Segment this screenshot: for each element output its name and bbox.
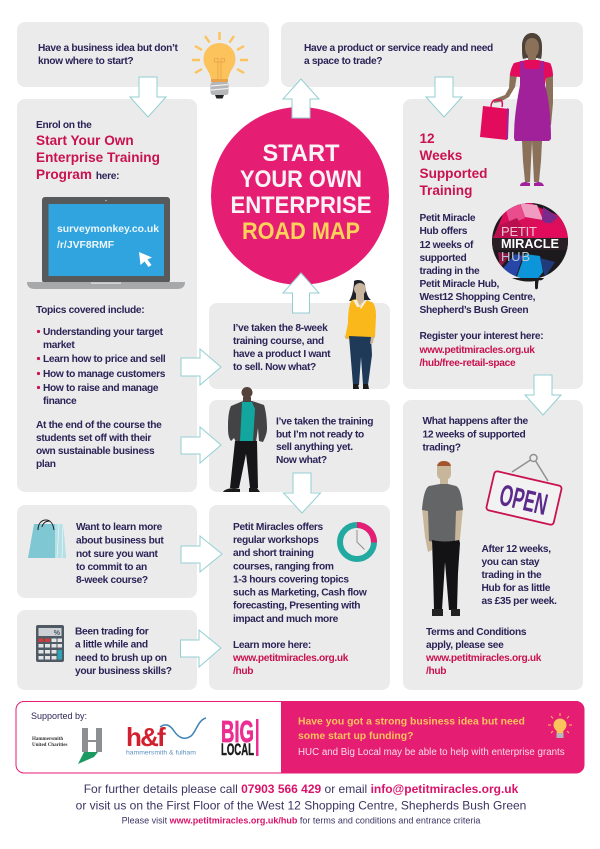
panel: not ready to sell: sell anything yet. — [276, 442, 353, 453]
title circle: ENTERPRISE — [230, 192, 372, 219]
panel: workshops and short courses: courses, ranging from — [233, 562, 334, 572]
text: hub description: supported — [420, 253, 466, 264]
panel: learn more about business — [17, 505, 197, 598]
panel: supporters and funding — [16, 701, 584, 773]
logo: Big Local — [221, 714, 258, 759]
panel: workshops and short courses: Learn more here: — [233, 640, 311, 651]
heading: 12 weeks: Training — [420, 183, 472, 198]
text: hub description: Register your interest here: — [420, 331, 543, 342]
panel: brush up on skills: need to brush up on — [75, 653, 167, 664]
logo: Big Local: LOCAL — [221, 741, 254, 759]
title circle — [211, 107, 389, 285]
panel: taken 8-week course: training course, and — [233, 336, 324, 347]
title circle: ROAD MAP — [242, 218, 360, 245]
title circle: START — [262, 140, 340, 167]
heading: 12 weeks: Weeks — [420, 148, 462, 163]
text: hub description: /hub/free-retail-space — [420, 358, 516, 369]
panel: learn more about business: 8-week course? — [76, 575, 148, 586]
panel: product or service question: Have a product or service ready and need — [304, 43, 493, 54]
text: topics covered: How to manage customers — [43, 369, 166, 380]
panel: not ready to sell: I’ve taken the training — [276, 416, 373, 428]
arrow: training to not ready — [181, 427, 221, 463]
figure: woman in yellow jumper — [344, 280, 376, 389]
panel: enrol on training program: Enrol on the — [36, 120, 92, 131]
figure: woman with apron and bag — [480, 33, 553, 186]
panel: workshops and short courses: and short training — [233, 548, 314, 559]
logo: Petit Miracle Hub: PETIT — [501, 224, 537, 239]
text: hub description: Shepherd’s Bush Green — [420, 305, 528, 316]
footer contact details: or visit us on the First Floor of the West 12 Shopping Centre, Shepherds Bush Green — [76, 798, 526, 812]
text: hub description: www.petitmiracles.org.uk — [418, 345, 535, 356]
icon: laptop with survey link — [27, 197, 185, 289]
panel: workshops and short courses: impact and much more — [233, 614, 339, 625]
panel: learn more about business: to commit to an — [76, 562, 147, 573]
panel: learn more about business: not sure you want — [76, 549, 158, 560]
panel: workshops and short courses: Petit Miracles offers — [233, 522, 324, 533]
arrow: idea down to training — [130, 77, 166, 117]
panel: brush up on skills — [17, 610, 197, 690]
figure: man in grey jacket — [223, 387, 267, 492]
arrow: weeks down to after — [525, 375, 561, 415]
logo: hammersmith and fulham: hammersmith & fulham — [126, 750, 196, 756]
panel: taken 8-week course: have a product I want — [233, 349, 331, 360]
panel: after the 12 weeks: as £35 per week. — [482, 596, 557, 607]
text: hub description: Petit Miracle — [420, 213, 476, 224]
logo: hammersmith and fulham: h&f — [126, 722, 166, 752]
panel: after the 12 weeks — [403, 400, 583, 690]
panel: after the 12 weeks: After 12 weeks, — [482, 544, 551, 555]
text: topics covered: At the end of the course the — [36, 420, 162, 431]
arrow: training to product question — [181, 349, 221, 385]
footer contact details — [76, 782, 526, 826]
panel: learn more about business: Want to learn more — [76, 522, 163, 533]
heading: training program: Program here: — [36, 167, 119, 182]
text: funding prompt: some start up funding? — [298, 731, 413, 742]
icon: laptop with survey link: surveymonkey.co.uk — [57, 224, 159, 235]
panel: after the 12 weeks: 12 weeks of supported — [422, 430, 526, 440]
text: topics covered: students set off with their — [36, 433, 151, 444]
arrow: product up to title — [283, 79, 319, 118]
panel: after the 12 weeks: What happens after the — [422, 416, 529, 427]
panel: after the 12 weeks: trading in the — [482, 570, 542, 581]
panel: taken 8-week course: to sell. Now what? — [233, 362, 316, 373]
supported by label: Supported by: — [31, 711, 87, 721]
panel: business idea question: know where to start? — [38, 56, 133, 67]
footer contact details: Please visit www.petitmiracles.org.uk/hub for terms and conditions and entrance criteria — [122, 816, 480, 826]
panel: enrol on training program — [17, 99, 197, 492]
text: hub description: West12 Shopping Centre, — [420, 292, 536, 303]
text: hub description: Petit Miracle Hub, — [420, 279, 500, 290]
heading: 12 weeks: 12 — [420, 131, 435, 146]
text: funding prompt: Have you got a strong business idea but need — [298, 716, 525, 728]
logo: Petit Miracle Hub — [490, 200, 570, 289]
text: topics covered: How to raise and manage — [43, 383, 159, 394]
panel: product or service question: a space to trade? — [304, 56, 382, 67]
heading: 12 weeks: Supported — [420, 166, 487, 181]
panel: 12 weeks supported training — [403, 99, 583, 389]
heading: training program: Start Your Own — [36, 133, 134, 148]
text: topics covered: Learn how to price and sell — [43, 354, 166, 365]
logo: Hammersmith United Charities: United Charities — [32, 743, 67, 748]
text: hub description: Hub offers — [420, 226, 468, 237]
text: topics covered: plan — [36, 459, 56, 470]
logo: Hammersmith United Charities — [32, 728, 102, 764]
panel: not ready to sell: Now what? — [276, 455, 327, 466]
text: hub description: trading in the — [420, 266, 480, 277]
logo: Petit Miracle Hub: HUB — [501, 249, 530, 264]
icon: shopping bag — [28, 520, 66, 558]
text: topics covered: market — [43, 340, 75, 351]
panel: after the 12 weeks: trading? — [422, 442, 461, 454]
icon: open sign — [486, 454, 562, 525]
text: topics covered: Understanding your target — [43, 327, 164, 338]
panel: after the 12 weeks: Hub for as little — [482, 583, 551, 594]
panel: taken 8-week course: I’ve taken the 8-week — [233, 323, 328, 334]
text: topics covered: finance — [43, 396, 77, 407]
panel: workshops and short courses: forecasting, Presenting with — [233, 600, 360, 612]
panel: business idea question — [17, 22, 269, 87]
figure: man in grey shirt — [422, 461, 463, 616]
panel: taken 8-week course — [209, 303, 390, 389]
panel: workshops and short courses: /hub — [233, 666, 253, 677]
text: topics covered: Topics covered include: — [36, 305, 144, 316]
arrow: product down to weeks — [426, 77, 462, 117]
text: grants note: HUC and Big Local may be able to help with enterprise grants — [298, 747, 565, 758]
arrow: brush up to workshops — [180, 630, 221, 667]
arrow: learn more to workshops — [181, 536, 222, 572]
panel: business idea question: Have a business idea but don’t — [38, 43, 178, 54]
panel: workshops and short courses — [209, 505, 390, 690]
panel: workshops and short courses: regular workshops — [233, 535, 319, 546]
icon: laptop with survey link: /r/JVF8RMF — [57, 240, 114, 251]
icon: calculator — [36, 625, 64, 662]
text: topics covered: own sustainable business — [36, 446, 155, 457]
logo: Petit Miracle Hub: MIRACLE — [501, 236, 559, 251]
panel: workshops and short courses: 1-3 hours covering topics — [233, 574, 349, 586]
icon: calculator: % — [54, 630, 61, 637]
panel: after the 12 weeks: /hub — [426, 666, 446, 677]
footer contact details: For further details please call 07903 566 429 or email info@petitmiracles.org.uk — [84, 782, 519, 796]
panel: not ready to sell — [209, 400, 390, 492]
heading: training program: Enterprise Training — [36, 150, 160, 165]
logo: Big Local: BIG — [221, 714, 254, 749]
logo: hammersmith and fulham — [126, 718, 206, 756]
bullets — [37, 330, 40, 389]
panel: brush up on skills: Been trading for — [75, 626, 149, 638]
logo: Hammersmith United Charities: Hammersmith — [32, 737, 63, 742]
panel: product or service question — [281, 22, 583, 87]
panel: brush up on skills: a little while and — [75, 640, 148, 650]
arrow: product question up to title — [283, 273, 319, 313]
icon: open sign: OPEN — [496, 479, 551, 522]
icon: light bulb — [192, 32, 248, 98]
icon: clock — [340, 522, 377, 559]
panel: after the 12 weeks: you can stay — [482, 557, 540, 568]
panel: workshops and short courses: such as Marketing, Cash flow — [233, 588, 367, 598]
panel: after the 12 weeks: apply, please see — [426, 640, 504, 651]
panel: not ready to sell: but I’m not ready to — [276, 430, 364, 440]
panel: after the 12 weeks: www.petitmiracles.org.uk — [425, 653, 542, 664]
panel: workshops and short courses: www.petitmiracles.org.uk — [232, 653, 349, 664]
panel: after the 12 weeks: Terms and Conditions — [426, 627, 527, 638]
panel: brush up on skills: your business skills? — [75, 666, 172, 677]
arrow: not ready down to workshops — [284, 473, 320, 513]
icon: small light bulb — [548, 713, 572, 738]
panel: learn more about business: about business but — [76, 536, 164, 546]
title circle: YOUR OWN — [240, 166, 362, 193]
text: hub description: 12 weeks of — [420, 240, 474, 251]
